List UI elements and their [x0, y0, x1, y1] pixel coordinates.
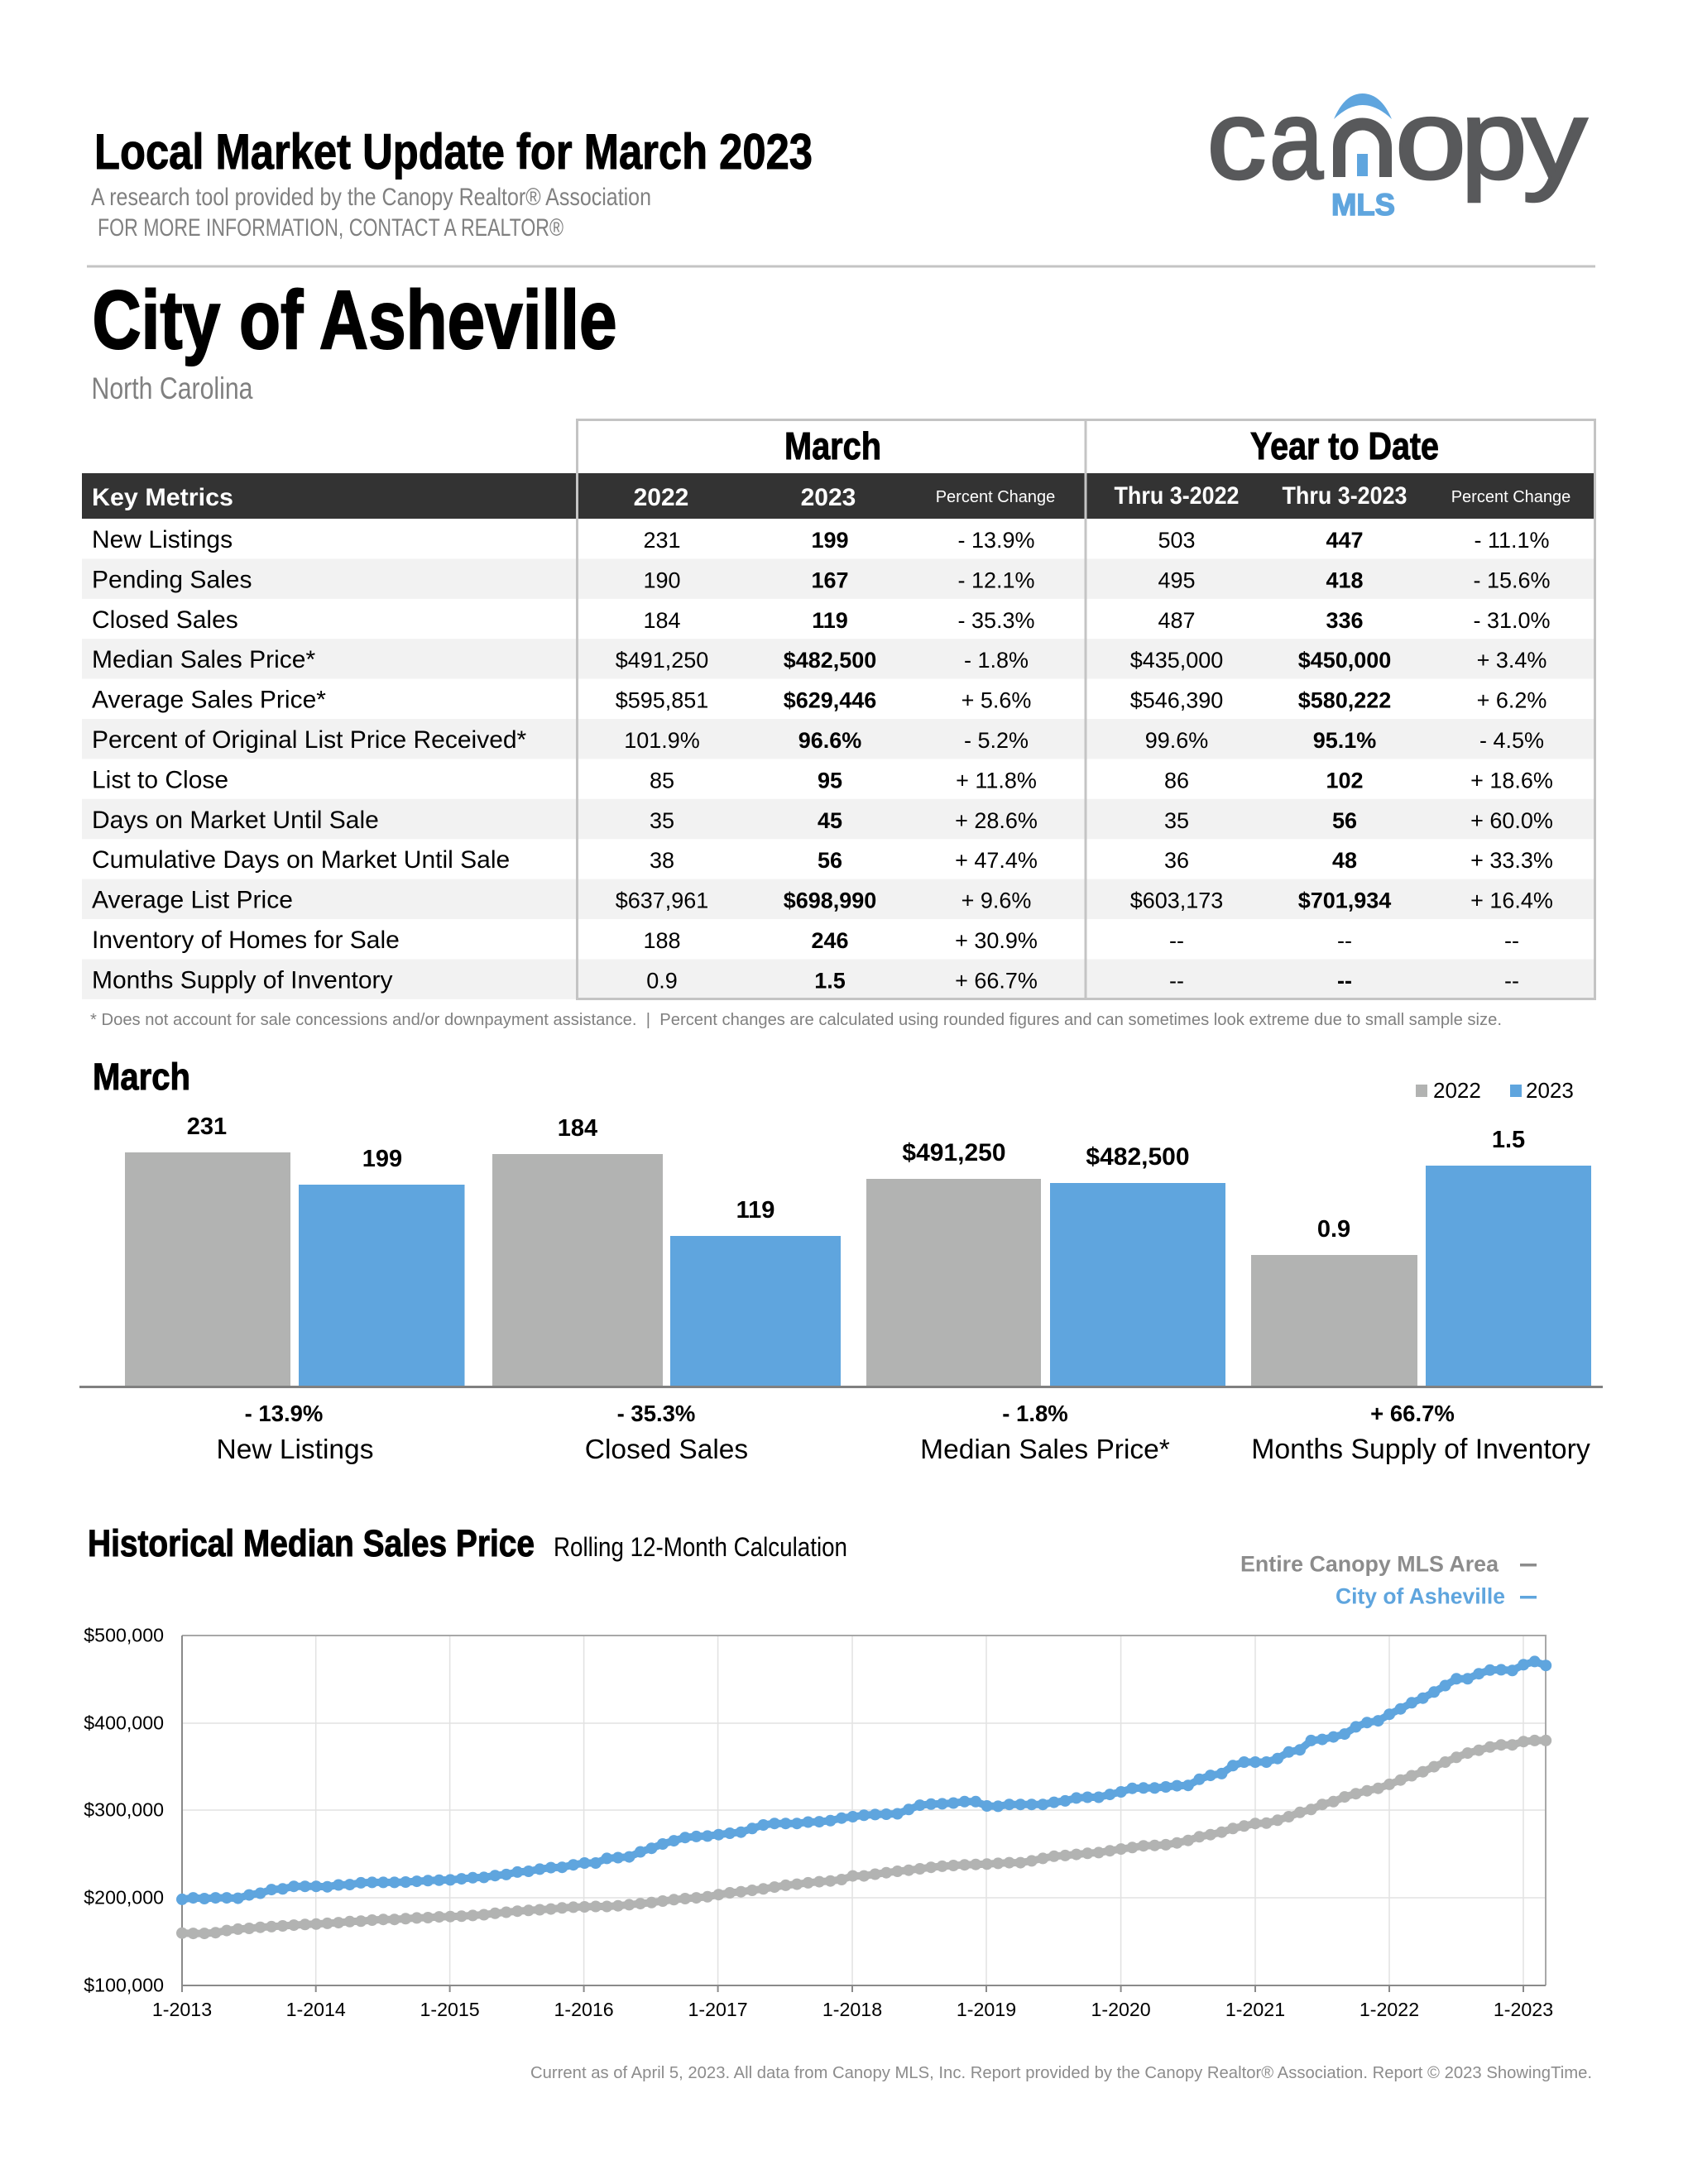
bars: Median Sales Price: Median Sales Price* — [920, 1434, 1170, 1465]
row: Inventory of Homes for Sale: 188 — [643, 928, 681, 953]
row: Average List Price: + 16.4% — [1470, 888, 1553, 913]
row: Cumulative Days on Market Until Sale — [92, 846, 1553, 874]
y axis labels: $500,000 — [84, 1625, 164, 1646]
logo: Canopy MLS: o — [1395, 76, 1466, 202]
table group headings — [784, 424, 1439, 467]
row: Pending Sales: 418 — [1326, 568, 1364, 592]
row: List to Close: + 11.8% — [956, 768, 1037, 793]
bars: New Listings: - 13.9% — [245, 1401, 323, 1426]
series: Entire Canopy MLS Area — [182, 1741, 1546, 1933]
x axis labels: 1-2019 — [957, 1999, 1016, 2020]
row: Months Supply of Inventory: + 66.7% — [955, 968, 1038, 993]
row: Months Supply of Inventory: 0.9 — [646, 968, 678, 993]
row: Closed Sales: - 35.3% — [957, 608, 1035, 633]
line chart legend — [1240, 1552, 1537, 1608]
row: Median Sales Price: - 1.8% — [964, 648, 1029, 673]
row: Average List Price: Average List Price — [92, 887, 293, 914]
row: Days on Market Until Sale — [92, 807, 1553, 834]
row: Pending Sales: 190 — [643, 568, 681, 592]
row: Days on Market Until Sale: + 28.6% — [955, 808, 1038, 833]
y axis labels: $300,000 — [84, 1798, 164, 1820]
row: Percent of Original List Price Received: 99.6% — [1145, 728, 1208, 753]
table group headings: March — [784, 424, 881, 467]
table group headings: Year to Date — [1250, 424, 1439, 467]
panel: key metrics table — [82, 420, 1595, 999]
row: Closed Sales — [92, 606, 1551, 634]
subtitle: research tool: A research tool provided by the Canopy Realtor® Association — [91, 184, 651, 211]
row: Closed Sales: - 31.0% — [1473, 608, 1551, 633]
row: Average List Price: $698,990 — [784, 888, 876, 913]
row: Inventory of Homes for Sale: Inventory of Homes for Sale — [92, 927, 400, 954]
row: Days on Market Until Sale: Days on Market Until Sale — [92, 807, 379, 834]
row: Inventory of Homes for Sale — [92, 927, 1519, 954]
table footnote: * Does not account for sale concessions and/or downpayment assistance. | Percent changes are calculated using rounded figures and can sometimes look extreme due to small sample size. — [90, 1011, 1502, 1029]
x axis labels: 1-2020 — [1091, 1999, 1151, 2020]
row: List to Close: 85 — [650, 768, 674, 793]
row: Inventory of Homes for Sale: + 30.9% — [955, 928, 1038, 953]
y axis labels: $200,000 — [84, 1886, 164, 1908]
bars: Months Supply of Inventory: + 66.7% — [1370, 1401, 1455, 1426]
row: Cumulative Days on Market Until Sale: 36 — [1164, 848, 1189, 873]
location heading: City of Asheville — [93, 274, 617, 366]
row: Days on Market Until Sale: 35 — [1164, 808, 1189, 833]
row: Percent of Original List Price Received: 101.9% — [624, 728, 700, 753]
x axis labels: 1-2017 — [688, 1999, 748, 2020]
bars: Closed Sales — [492, 1115, 841, 1465]
row: Inventory of Homes for Sale: -- — [1504, 928, 1519, 953]
row: Closed Sales: 336 — [1326, 608, 1364, 633]
table header row: Percent Change — [936, 488, 1055, 506]
row: Median Sales Price: $491,250 — [616, 648, 708, 673]
row: List to Close: 102 — [1326, 768, 1364, 793]
row: New Listings: - 13.9% — [957, 528, 1035, 553]
row: Closed Sales: Closed Sales — [92, 606, 238, 634]
bars: Median Sales Price — [866, 1139, 1225, 1465]
row: Days on Market Until Sale: + 60.0% — [1470, 808, 1553, 833]
row: Months Supply of Inventory — [92, 966, 1519, 994]
row: New Listings: - 11.1% — [1474, 528, 1550, 553]
row: Inventory of Homes for Sale: 246 — [811, 928, 849, 953]
row: Median Sales Price — [92, 646, 1547, 673]
row: Average Sales Price: $629,446 — [784, 688, 876, 713]
logo: Canopy MLS: MLS — [1331, 188, 1395, 222]
logo: Canopy MLS: y — [1523, 76, 1587, 202]
y axis labels: $100,000 — [84, 1974, 164, 1995]
table header row: Thru 3-2022 — [1114, 482, 1240, 510]
row: Pending Sales: Pending Sales — [92, 566, 252, 593]
bars: Closed Sales: Closed Sales — [585, 1434, 748, 1465]
row: Median Sales Price: + 3.4% — [1477, 648, 1547, 673]
row: Median Sales Price: $435,000 — [1130, 648, 1223, 673]
bars: Median Sales Price: $482,500 — [1086, 1143, 1190, 1171]
series: City of Asheville — [182, 1661, 1546, 1899]
row: Average Sales Price — [92, 687, 1547, 714]
row: Pending Sales: - 15.6% — [1473, 568, 1551, 592]
logo: Canopy MLS: p — [1461, 76, 1527, 202]
bars: New Listings: New Listings — [217, 1434, 373, 1465]
row: Average List Price: $637,961 — [616, 888, 708, 913]
row: Months Supply of Inventory: -- — [1504, 968, 1519, 993]
row: List to Close: 86 — [1164, 768, 1189, 793]
bars: Closed Sales: 119 — [736, 1197, 774, 1224]
bars: New Listings — [125, 1114, 465, 1465]
row: New Listings: 199 — [811, 528, 849, 553]
table header row: 2022 — [634, 484, 688, 511]
row: New Listings: 231 — [643, 528, 681, 553]
line chart: historical median sales price — [84, 1625, 1553, 2020]
row: Percent of Original List Price Received: - 4.5% — [1479, 728, 1544, 753]
bars: Months Supply of Inventory — [1251, 1127, 1591, 1465]
x axis labels: 1-2016 — [554, 1999, 614, 2020]
row: List to Close: 95 — [818, 768, 842, 793]
bars: New Listings: 199 — [362, 1146, 402, 1172]
heading: historical median sales price: Historical Median Sales Price — [88, 1522, 535, 1564]
row: Inventory of Homes for Sale: -- — [1337, 928, 1352, 953]
bar chart — [79, 1114, 1603, 1465]
subheading: rolling 12-month calculation: Rolling 12-Month Calculation — [554, 1532, 847, 1562]
row: Average Sales Price: $546,390 — [1130, 688, 1223, 713]
row: Median Sales Price: $482,500 — [784, 648, 876, 673]
table header row: Percent Change — [1451, 488, 1571, 506]
row: Median Sales Price: $450,000 — [1298, 648, 1391, 673]
table header row: Thru 3-2023 — [1283, 482, 1407, 510]
row: Cumulative Days on Market Until Sale: + 47.4% — [955, 848, 1038, 873]
row: New Listings — [92, 526, 1550, 553]
row: Average Sales Price: $580,222 — [1298, 688, 1391, 713]
row: Cumulative Days on Market Until Sale: Cumulative Days on Market Until Sale — [92, 846, 510, 874]
y axis labels: $400,000 — [84, 1712, 164, 1734]
line chart legend: City of Asheville — [1336, 1583, 1505, 1608]
row: Cumulative Days on Market Until Sale: 48 — [1332, 848, 1357, 873]
bars: Closed Sales: 184 — [558, 1115, 597, 1142]
x axis labels — [152, 1999, 1553, 2020]
x axis labels: 1-2013 — [152, 1999, 212, 2020]
x axis labels: 1-2015 — [420, 1999, 480, 2020]
row: Average List Price — [92, 887, 1553, 914]
row: Average List Price: $603,173 — [1130, 888, 1223, 913]
row: Days on Market Until Sale: 35 — [650, 808, 674, 833]
row: Average Sales Price: $595,851 — [616, 688, 708, 713]
y axis labels — [84, 1625, 164, 1995]
row: Median Sales Price: Median Sales Price* — [92, 646, 315, 673]
footer note: Current as of April 5, 2023. All data from Canopy MLS, Inc. Report provided by the Canopy Realtor® Association. Report © 2023 ShowingTime. — [530, 2064, 1592, 2082]
row: Months Supply of Inventory: -- — [1169, 968, 1184, 993]
row: Percent of Original List Price Received: 95.1% — [1313, 728, 1376, 753]
row: Pending Sales: 167 — [811, 568, 849, 592]
row: Percent of Original List Price Received: - 5.2% — [964, 728, 1029, 753]
row: Closed Sales: 119 — [812, 608, 848, 633]
row: Average Sales Price: Average Sales Price* — [92, 687, 326, 714]
bars: Median Sales Price: $491,250 — [902, 1139, 1006, 1166]
row: Cumulative Days on Market Until Sale: 56 — [818, 848, 842, 873]
x axis labels: 1-2018 — [822, 1999, 882, 2020]
x axis labels: 1-2014 — [286, 1999, 346, 2020]
heading: March bar chart: March — [93, 1056, 190, 1098]
row: New Listings: New Listings — [92, 526, 233, 553]
x axis labels: 1-2021 — [1225, 1999, 1285, 2020]
logo: Canopy MLS — [1206, 76, 1587, 222]
row: Inventory of Homes for Sale: -- — [1169, 928, 1184, 953]
x axis labels: 1-2023 — [1494, 1999, 1553, 2020]
row: List to Close: List to Close — [92, 766, 228, 793]
row: Percent of Original List Price Received — [92, 726, 1544, 754]
row: Pending Sales — [92, 566, 1551, 593]
row: Days on Market Until Sale: 56 — [1332, 808, 1357, 833]
bars: Months Supply of Inventory: Months Supply of Inventory — [1251, 1434, 1590, 1465]
bars: Months Supply of Inventory: 1.5 — [1492, 1127, 1525, 1153]
row: Average List Price: + 9.6% — [961, 888, 1031, 913]
bar chart legend: 2022 — [1433, 1078, 1481, 1103]
table header row — [92, 482, 1571, 511]
location subheading: North Carolina — [91, 371, 253, 405]
row: Pending Sales: - 12.1% — [957, 568, 1035, 592]
row: Days on Market Until Sale: 45 — [818, 808, 842, 833]
row: Months Supply of Inventory: -- — [1337, 968, 1352, 993]
title: Local Market Update for March 2023 — [94, 124, 813, 180]
row: Cumulative Days on Market Until Sale: + 33.3% — [1470, 848, 1553, 873]
row: Closed Sales: 487 — [1158, 608, 1196, 633]
row: Months Supply of Inventory: 1.5 — [814, 968, 846, 993]
row: New Listings: 503 — [1158, 528, 1196, 553]
row: Average Sales Price: + 6.2% — [1477, 688, 1547, 713]
table header row: 2023 — [801, 484, 856, 511]
row: List to Close: + 18.6% — [1470, 768, 1553, 793]
bar chart legend — [1416, 1078, 1574, 1103]
row: New Listings: 447 — [1326, 528, 1364, 553]
row: List to Close — [92, 766, 1553, 793]
row: Cumulative Days on Market Until Sale: 38 — [650, 848, 674, 873]
row: Percent of Original List Price Received: 96.6% — [798, 728, 861, 753]
x axis labels: 1-2022 — [1360, 1999, 1419, 2020]
line chart legend: Entire Canopy MLS Area — [1240, 1552, 1499, 1577]
table header row: Key Metrics — [92, 484, 233, 511]
row: Pending Sales: 495 — [1158, 568, 1196, 592]
row: Percent of Original List Price Received: Percent of Original List Price Received* — [92, 726, 527, 754]
logo: Canopy MLS: c — [1206, 76, 1266, 202]
bars: Closed Sales: - 35.3% — [617, 1401, 695, 1426]
bars: Months Supply of Inventory: 0.9 — [1317, 1216, 1350, 1243]
row: Months Supply of Inventory: Months Supply of Inventory — [92, 966, 393, 994]
logo: Canopy MLS: a — [1269, 76, 1323, 202]
row: Average List Price: $701,934 — [1298, 888, 1391, 913]
subtitle: contact: FOR MORE INFORMATION, CONTACT A REALTOR® — [98, 214, 563, 242]
row: Average Sales Price: + 5.6% — [961, 688, 1031, 713]
bars: New Listings: 231 — [187, 1114, 227, 1140]
bars: Median Sales Price: - 1.8% — [1002, 1401, 1068, 1426]
row: Closed Sales: 184 — [643, 608, 681, 633]
bar chart legend: 2023 — [1526, 1078, 1574, 1103]
